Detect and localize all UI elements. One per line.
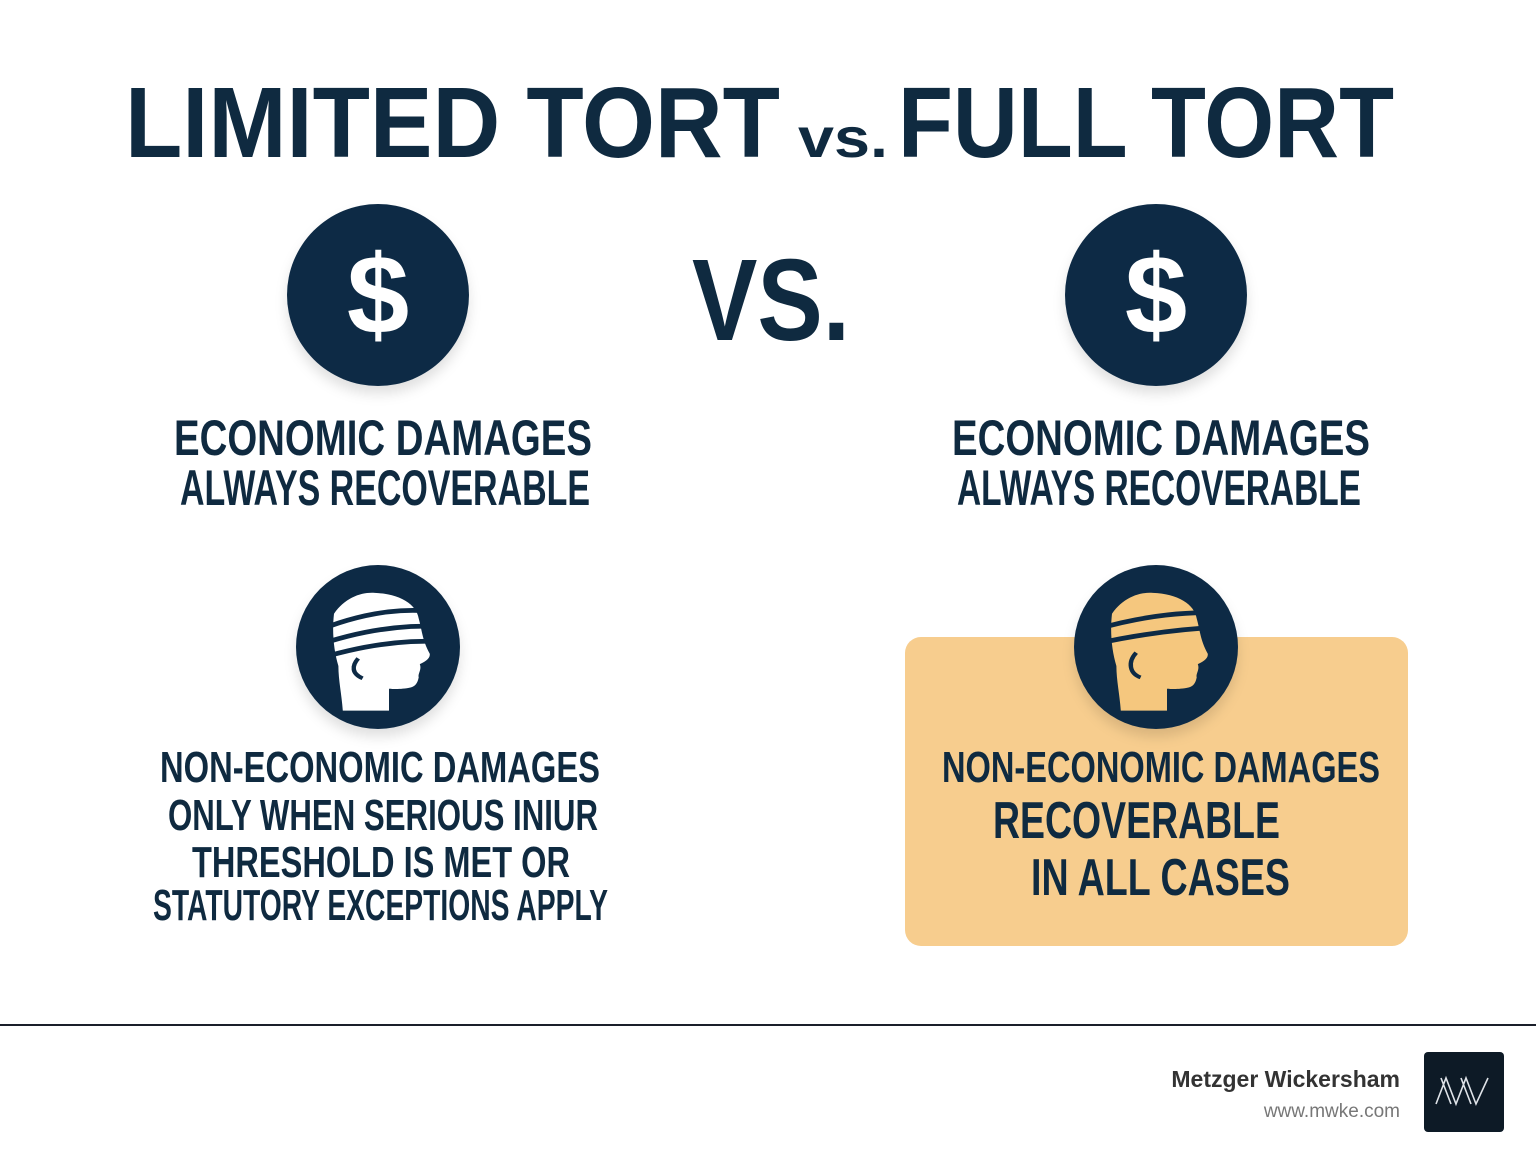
- text: right non-economic: [942, 743, 1380, 907]
- text: left economic: ALWAYS RECOVERABLE: [180, 460, 590, 516]
- title: FULL TORT: [898, 67, 1394, 179]
- icon: dollar left: [287, 204, 469, 386]
- text: left non-economic: STATUTORY EXCEPTIONS APPLY: [153, 881, 608, 930]
- footer: brand text: [1171, 1066, 1400, 1122]
- title: vs.: [798, 106, 888, 169]
- text: right non-economic: RECOVERABLE: [993, 792, 1280, 850]
- text: right non-economic: IN ALL CASES: [1031, 849, 1290, 907]
- vs label: VS.: [692, 235, 850, 365]
- footer: brand text: www.mwke.com: [1263, 1101, 1400, 1122]
- text: left non-economic: ONLY WHEN SERIOUS INIUR: [168, 791, 598, 840]
- icon: head right: [1074, 565, 1238, 729]
- footer: brand text: Metzger Wickersham: [1171, 1066, 1400, 1092]
- text: left economic: ECONOMIC DAMAGES: [174, 410, 592, 466]
- panel: full tort highlight: [905, 637, 1408, 946]
- icon: head left: [296, 565, 460, 729]
- icon: dollar right: $: [1125, 232, 1187, 357]
- title: [125, 67, 1394, 179]
- text: left non-economic: THRESHOLD IS MET OR: [192, 838, 570, 887]
- text: right economic: ECONOMIC DAMAGES: [952, 410, 1370, 466]
- icon: dollar left: $: [347, 232, 409, 357]
- text: right non-economic: NON-ECONOMIC DAMAGES: [942, 743, 1380, 792]
- text: right economic: [952, 410, 1370, 516]
- text: left non-economic: [153, 743, 608, 930]
- footer: logo: [1424, 1052, 1504, 1132]
- text: left non-economic: NON-ECONOMIC DAMAGES: [160, 743, 600, 792]
- text: left economic: [174, 410, 592, 516]
- title: LIMITED TORT: [125, 67, 780, 179]
- icon: dollar right: [1065, 204, 1247, 386]
